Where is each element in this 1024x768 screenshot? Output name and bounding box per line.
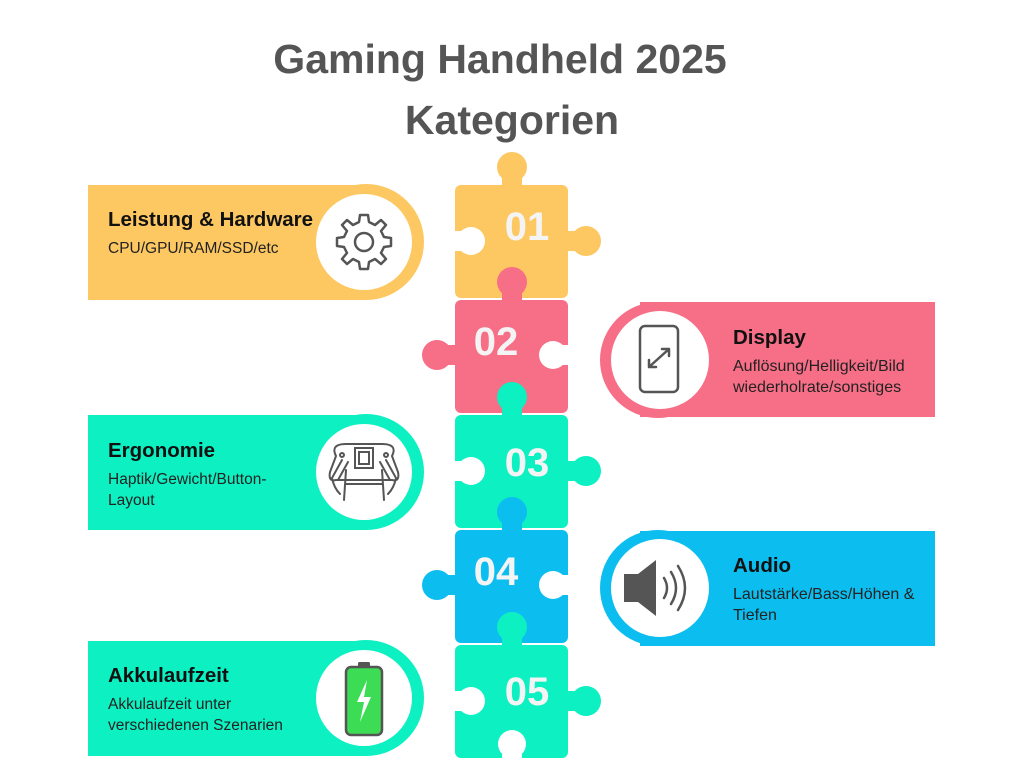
panel: Leistung & Hardware xyxy=(88,184,424,300)
panel: Audio: Audio xyxy=(733,554,791,577)
panel: Akkulaufzeit xyxy=(88,640,424,756)
puzzle piece 03 xyxy=(453,382,601,528)
puzzle piece 05: 05 xyxy=(505,670,549,714)
panel: Audio: Lautstärke/Bass/Höhen & xyxy=(733,586,915,603)
puzzle piece 04 xyxy=(422,497,570,643)
panel: Leistung & Hardware: CPU/GPU/RAM/SSD/etc xyxy=(108,240,279,257)
panel: Leistung & Hardware: Leistung & Hardware xyxy=(108,208,313,231)
panel: Akkulaufzeit: Akkulaufzeit xyxy=(108,664,229,687)
panel: Ergonomie: Haptik/Gewicht/Button- xyxy=(108,471,267,488)
panel: Ergonomie xyxy=(88,414,424,530)
puzzle piece 04: 04 xyxy=(474,550,519,594)
icon: battery xyxy=(346,662,382,735)
panel: Display xyxy=(600,302,935,418)
puzzle piece 01: 01 xyxy=(505,205,549,249)
panel: Display: Auflösung/Helligkeit/Bild xyxy=(733,358,905,375)
icon: speaker xyxy=(624,560,685,616)
icon: gear xyxy=(337,215,391,269)
panel: Ergonomie: Layout xyxy=(108,492,155,509)
puzzle piece 05 xyxy=(453,612,601,760)
panel: Akkulaufzeit: verschiedenen Szenarien xyxy=(108,717,283,734)
puzzle piece 02 xyxy=(422,267,570,413)
panel: Audio xyxy=(600,530,935,646)
title: Kategorien xyxy=(405,97,619,143)
icon: phone xyxy=(640,326,678,392)
panel: Akkulaufzeit: Akkulaufzeit unter xyxy=(108,696,231,713)
panel: Audio: Tiefen xyxy=(733,607,777,624)
icon: handheld xyxy=(330,444,398,500)
panel: Display: wiederholrate/sonstiges xyxy=(732,379,901,396)
title xyxy=(273,36,727,143)
puzzle piece 02: 02 xyxy=(474,320,518,364)
title: Gaming Handheld 2025 xyxy=(273,36,727,82)
panel: Display: Display xyxy=(733,326,807,349)
panel: Ergonomie: Ergonomie xyxy=(108,439,215,462)
puzzle piece 01 xyxy=(453,152,601,298)
puzzle piece 03: 03 xyxy=(505,441,549,485)
